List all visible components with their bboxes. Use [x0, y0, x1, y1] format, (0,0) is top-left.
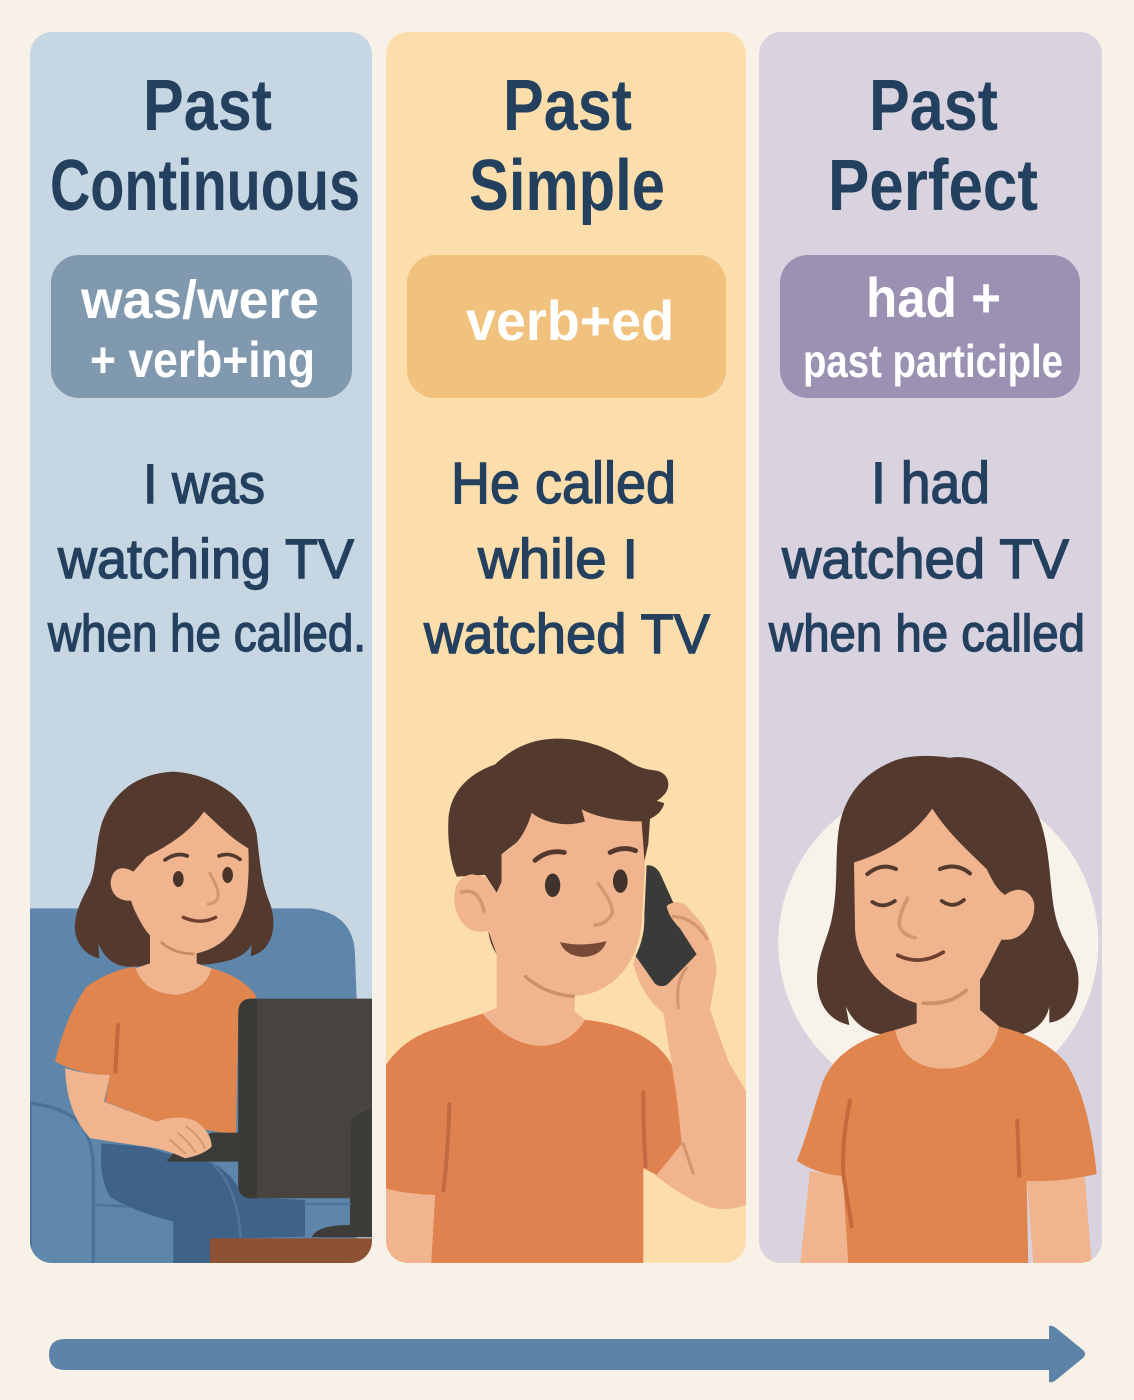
neck	[136, 936, 212, 995]
formula pill: verb+ed: verb+ed	[466, 289, 674, 352]
formula pill: was/were + verb+ing	[51, 255, 352, 398]
fingers	[666, 902, 696, 954]
heading: past simple: Past	[503, 66, 632, 146]
illustration: girl watching TV on sofa	[30, 772, 373, 1265]
formula pill: verb+ed	[407, 255, 726, 398]
chin crease	[526, 977, 573, 996]
example sentence: past continuous	[47, 452, 366, 663]
shirt	[797, 1027, 1097, 1265]
nose	[595, 884, 612, 925]
halo circle	[778, 814, 1098, 1065]
panel: past continuous	[30, 32, 373, 1265]
shirt	[55, 967, 257, 1135]
example sentence: past perfect: I had	[871, 451, 990, 516]
eyebrows	[535, 849, 636, 860]
example sentence: past simple	[423, 451, 711, 665]
hair	[75, 772, 273, 967]
face and neck	[854, 809, 1034, 1069]
arms	[800, 1171, 1092, 1265]
mouth	[560, 941, 607, 957]
shirt	[385, 1014, 682, 1265]
heading: past simple: Simple	[469, 146, 665, 226]
heading: past perfect: Perfect	[828, 146, 1038, 226]
formula pill: had + past participle: past participle	[803, 335, 1063, 387]
face and neck	[454, 809, 645, 1046]
chin crease	[923, 990, 966, 1003]
hair	[817, 756, 1078, 1034]
example sentence: past continuous: watching TV	[57, 527, 355, 590]
keyboard bar	[167, 1133, 243, 1162]
formula pill: was/were + verb+ing: was/were	[80, 270, 319, 330]
formula pill: was/were + verb+ing: + verb+ing	[90, 332, 315, 388]
example sentence: past continuous: when he called.	[47, 605, 366, 663]
example sentence: past perfect: watched TV	[781, 527, 1070, 590]
face	[111, 812, 249, 953]
eyebrows	[867, 867, 970, 874]
panel: past perfect	[759, 32, 1102, 1265]
example sentence: past simple: He called	[451, 451, 676, 516]
heading: past simple	[469, 66, 665, 226]
heading: past continuous: Past	[143, 66, 272, 146]
mouth	[183, 917, 216, 921]
TV back stand	[312, 1107, 373, 1237]
sofa	[30, 908, 357, 1265]
heading: past perfect	[828, 66, 1038, 226]
nose	[208, 873, 218, 904]
illustration: girl with eyes closed	[778, 756, 1098, 1265]
example sentence: past simple: while I	[477, 527, 638, 590]
heading: past continuous	[50, 66, 360, 226]
chin crease	[162, 943, 193, 954]
example sentence: past simple: watched TV	[423, 602, 711, 665]
closed eyes	[872, 900, 964, 905]
hair	[448, 739, 668, 893]
heading: past continuous: Continuous	[50, 146, 360, 226]
formula pill: had + past participle	[780, 255, 1080, 398]
lower arm	[385, 1188, 435, 1265]
heading: past perfect: Past	[869, 66, 998, 146]
panel: past simple	[385, 32, 747, 1265]
arm and hand	[65, 1068, 212, 1158]
eyes	[545, 869, 628, 897]
TV	[238, 999, 373, 1198]
nose	[899, 898, 915, 938]
illustration: boy on the phone	[385, 739, 747, 1265]
jeans	[101, 1143, 305, 1265]
example sentence: past continuous: I was	[143, 452, 265, 515]
phone	[636, 865, 697, 986]
mouth	[898, 952, 943, 960]
example sentence: past perfect	[768, 451, 1085, 663]
arrow: timeline	[49, 1326, 1085, 1382]
example sentence: past perfect: when he called	[768, 605, 1085, 663]
raised arm and hand	[633, 902, 747, 1209]
eyebrows	[165, 854, 240, 860]
eyes	[173, 867, 233, 887]
table	[210, 1238, 373, 1265]
formula pill: had + past participle: had +	[866, 266, 1001, 329]
